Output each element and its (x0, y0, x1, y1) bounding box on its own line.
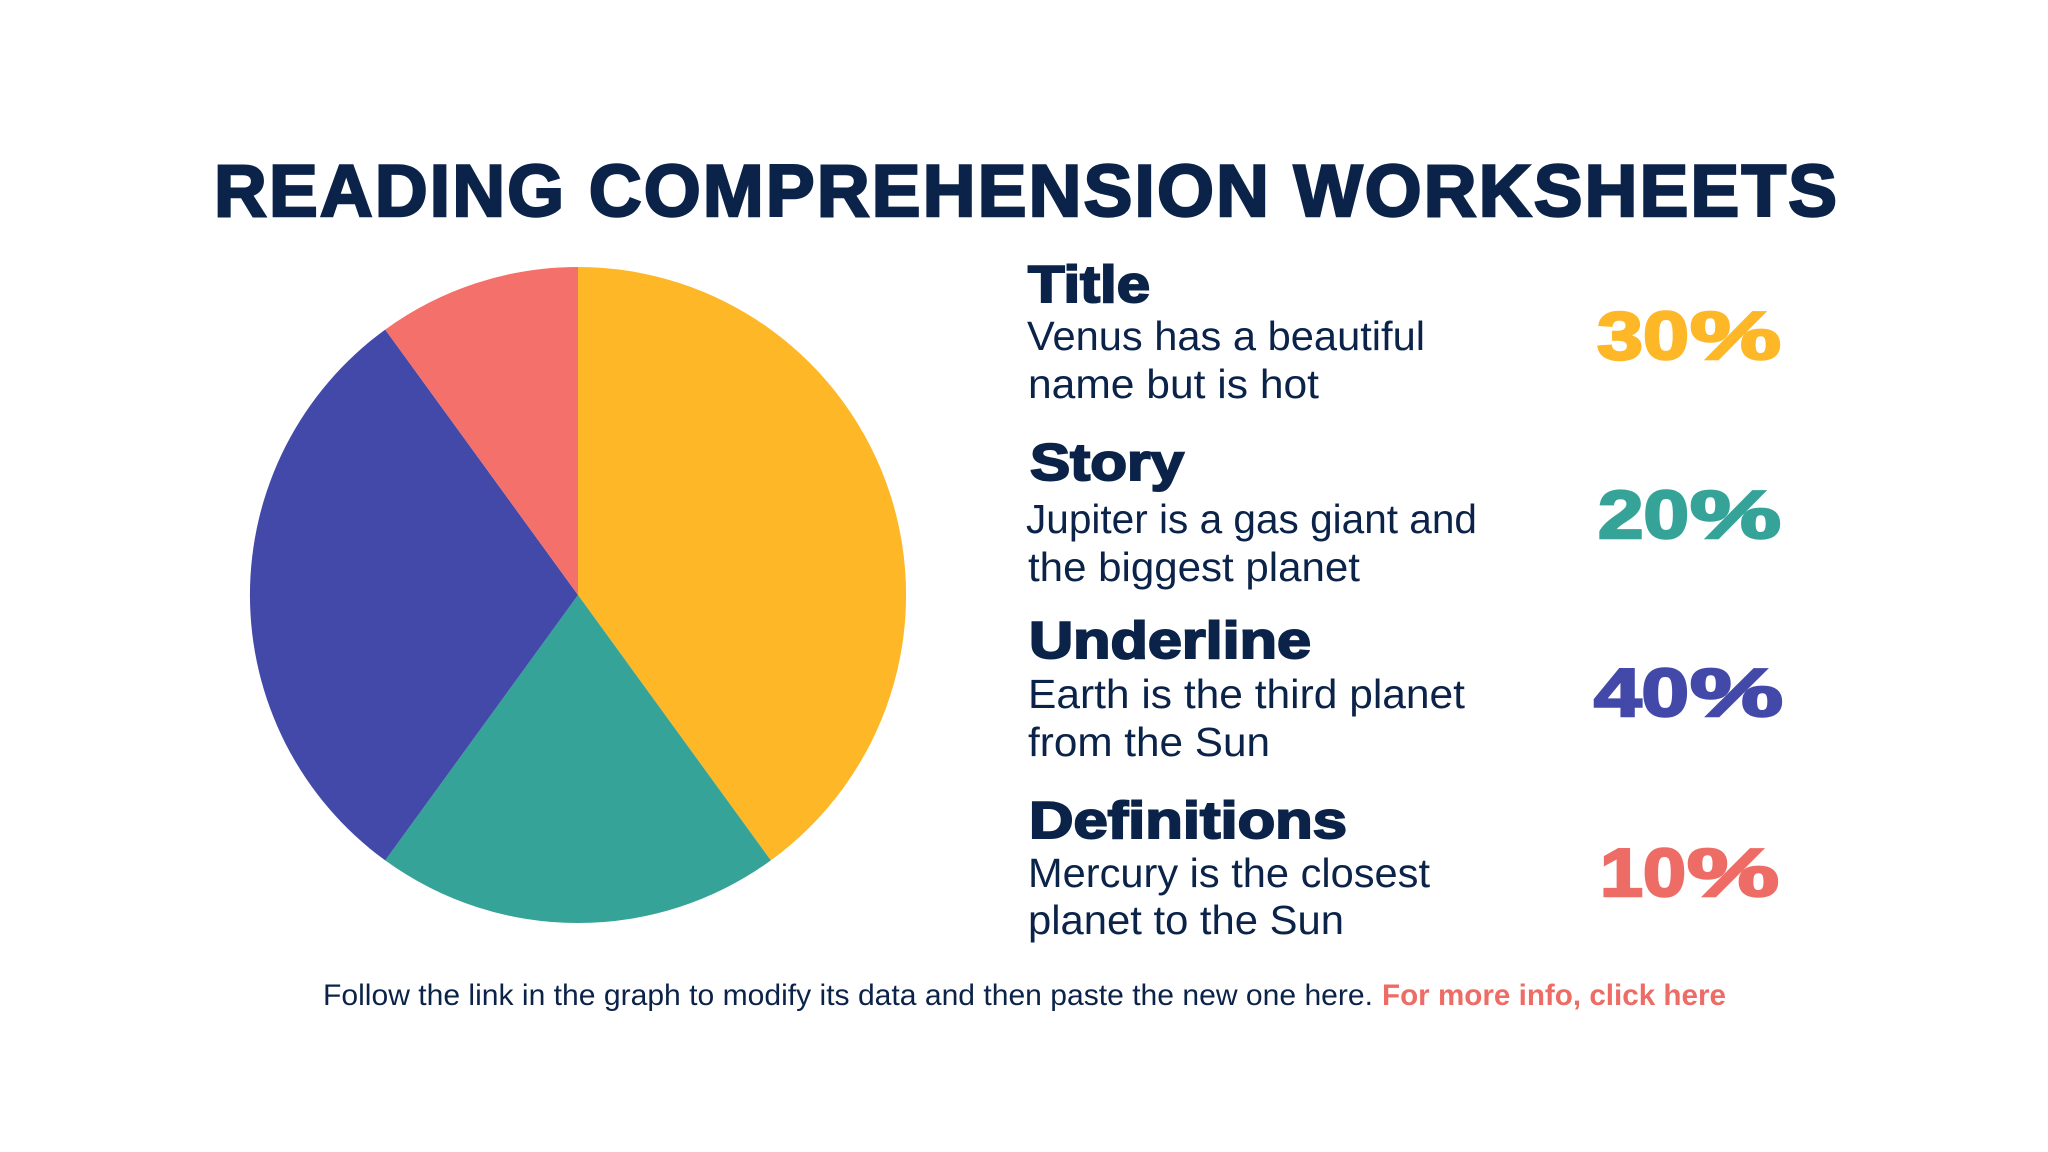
row: Title (1027, 256, 1781, 407)
digits: 40: 40 (1594, 655, 1689, 731)
row: Underline (1028, 612, 1783, 765)
percentage: 20% (1598, 477, 1781, 553)
percentage: 40% (1594, 655, 1783, 731)
title: READING COMPREHENSION WORKSHEETS (214, 151, 1837, 232)
slice: story 30% (250, 330, 578, 860)
heading: Story: Story (1030, 434, 1184, 492)
heading: Underline: Underline (1029, 612, 1311, 670)
description: Earth line 2: from the Sun (1028, 719, 1270, 765)
slice: underline 40% (578, 267, 906, 860)
description: Jupiter: Jupiter is a gas giant and (1026, 496, 1477, 542)
footer note (323, 979, 1726, 1012)
footer text: Follow the link in the graph to modify its data and then paste the new one here. (323, 979, 1373, 1012)
percent sign: % (1690, 298, 1781, 374)
row: Story (1026, 434, 1781, 590)
row: Definitions (1028, 792, 1779, 943)
description: Jupiter line 2: the biggest planet (1028, 544, 1361, 590)
description: Earth: Earth is the third planet (1028, 671, 1466, 717)
description: Mercury line 2: planet to the Sun (1028, 897, 1344, 943)
heading: Title: Title (1028, 256, 1150, 314)
heading: Definitions: Definitions (1029, 792, 1347, 850)
percent sign: % (1687, 835, 1779, 911)
digits: 20: 20 (1598, 477, 1689, 553)
slice: definitions 20% (385, 595, 771, 923)
pie chart (250, 267, 906, 923)
digits: 30: 30 (1597, 298, 1689, 374)
percentage: 10% (1600, 835, 1779, 911)
digits: 10: 10 (1600, 835, 1686, 911)
description: Venus line 2: name but is hot (1028, 361, 1320, 407)
percentage: 30% (1597, 298, 1781, 374)
description: Venus: Venus has a beautiful (1027, 313, 1425, 359)
footer link: For more info, click here (1382, 979, 1726, 1012)
percent sign: % (1690, 655, 1783, 731)
slice: title 10% (385, 267, 578, 595)
percent sign: % (1690, 477, 1781, 553)
description: Mercury: Mercury is the closest (1028, 850, 1431, 896)
